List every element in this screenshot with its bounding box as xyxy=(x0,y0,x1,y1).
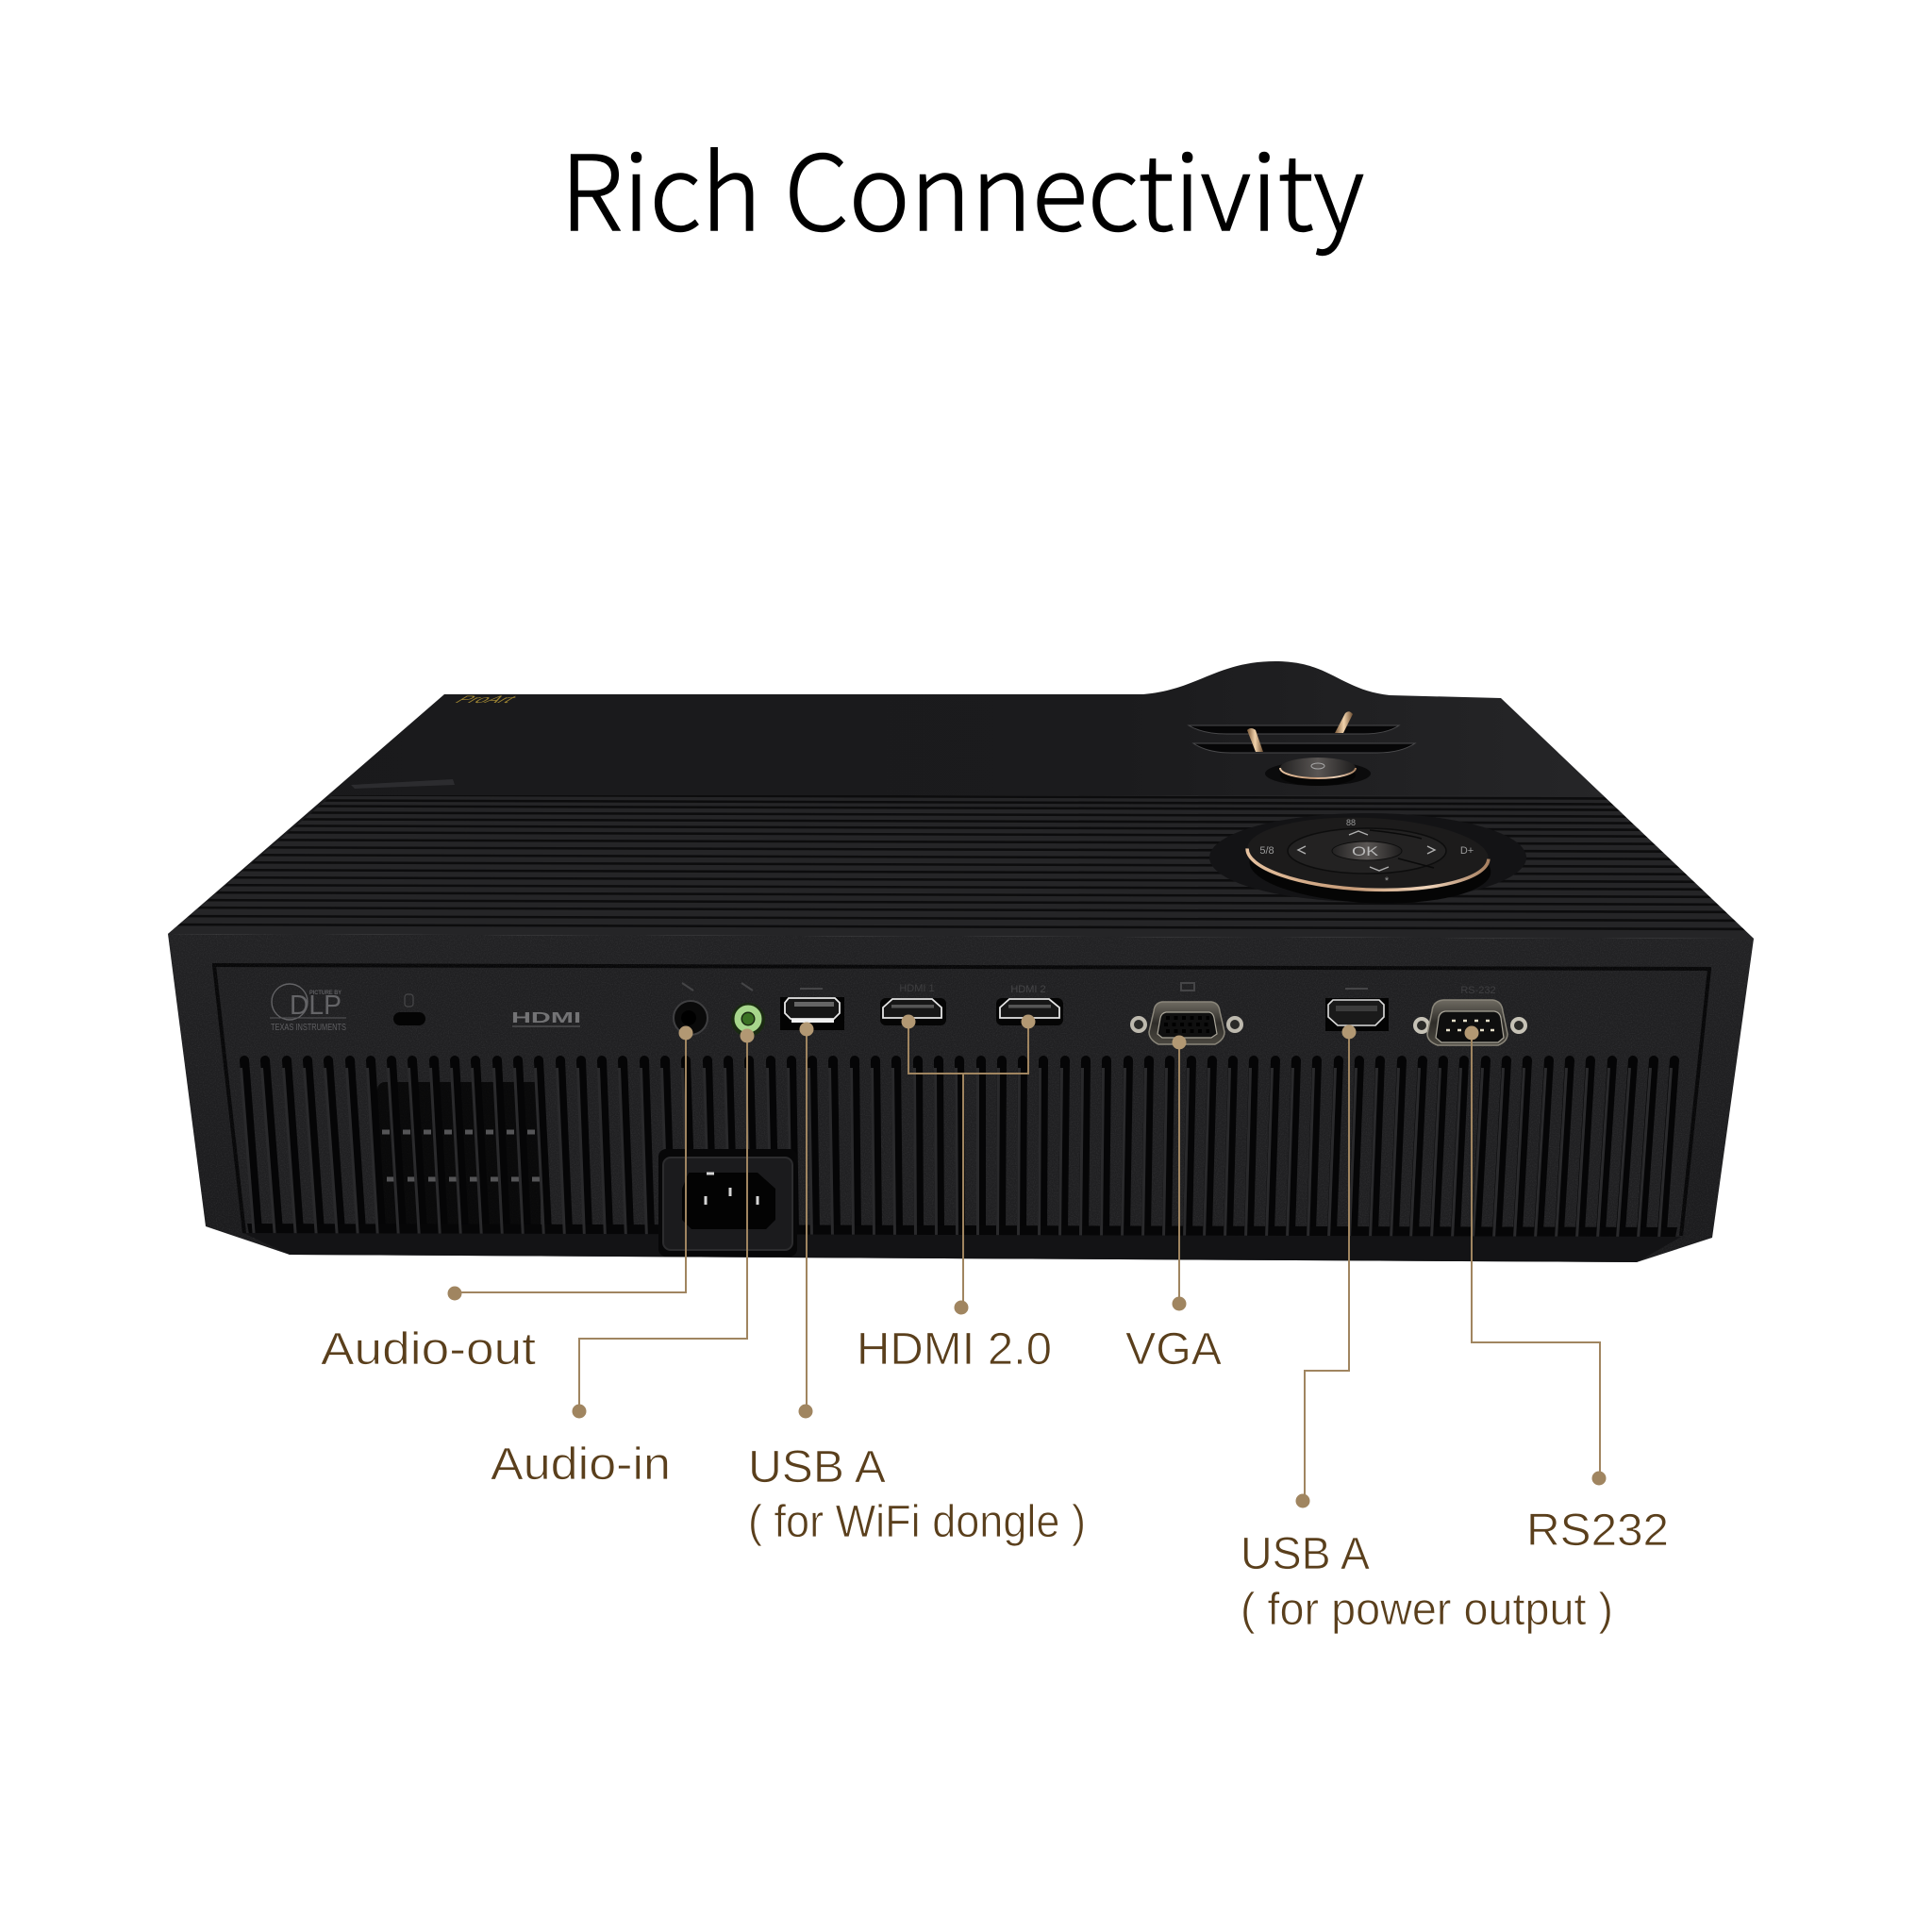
fan behind vents xyxy=(377,1082,541,1231)
callout: USB A for power output: ( for power output ) xyxy=(1241,1585,1613,1635)
control dial: 5/8 xyxy=(1259,845,1274,857)
DLP logo: DLP xyxy=(290,991,341,1021)
ventilation slots xyxy=(244,1060,1674,1231)
callout: USB A for WiFi dongle: USB A xyxy=(748,1442,886,1492)
panel edge shadows xyxy=(212,965,1711,1236)
projector body xyxy=(160,661,1764,1269)
DLP logo: PICTURE BY xyxy=(309,991,341,996)
port: VGA xyxy=(1132,1002,1241,1044)
DLP logo xyxy=(270,984,346,1033)
port: USB A power xyxy=(1325,998,1389,1031)
callout: USB A for WiFi dongle xyxy=(748,1023,1086,1547)
callout: USB A for WiFi dongle: ( for WiFi dongle ) xyxy=(748,1497,1086,1547)
HDMI logo xyxy=(511,1010,581,1026)
port: RS232 xyxy=(1415,1000,1525,1045)
DLP logo: TEXAS INSTRUMENTS xyxy=(271,1023,346,1033)
callout: RS232: RS232 xyxy=(1526,1506,1669,1556)
port: HDMI 1 xyxy=(880,998,946,1025)
dial face xyxy=(1245,812,1491,895)
slot bevels xyxy=(242,1068,1672,1239)
callout: audio-out xyxy=(321,1026,692,1374)
port: HDMI 2 xyxy=(996,998,1063,1025)
dial icons xyxy=(1298,831,1435,871)
control dial: 88 xyxy=(1346,818,1356,827)
port icon labels: HDMI 2 xyxy=(1010,984,1046,995)
port: USB A wifi xyxy=(780,997,844,1030)
security lock slot xyxy=(393,994,425,1025)
gold slider pins xyxy=(1335,711,1353,733)
slider slots xyxy=(1189,725,1399,734)
callout: audio-in: Audio-in xyxy=(491,1440,671,1490)
control dial: * xyxy=(1385,875,1390,887)
dial recess xyxy=(1209,813,1526,902)
control dial: OK xyxy=(1352,843,1379,858)
callout: HDMI 2.0: HDMI 2.0 xyxy=(857,1324,1052,1374)
callout: VGA xyxy=(1125,1036,1222,1374)
port icon labels xyxy=(682,983,1496,996)
ProArt logo: ProArt xyxy=(450,693,523,706)
bottom lip xyxy=(243,1233,1681,1262)
port icon labels: HDMI 1 xyxy=(899,983,935,994)
dial side xyxy=(1248,826,1492,908)
port: audio out xyxy=(674,1001,708,1035)
callout: audio-in xyxy=(491,1028,755,1490)
OK button xyxy=(1332,841,1402,860)
callout: RS232 xyxy=(1464,1026,1669,1556)
d-pad xyxy=(1288,828,1446,874)
slot base band xyxy=(247,1224,1677,1237)
power button xyxy=(1265,758,1371,786)
control dial: D+ xyxy=(1460,845,1474,857)
callout: VGA: VGA xyxy=(1125,1324,1222,1374)
callout: USB A for power output xyxy=(1241,1024,1613,1635)
projector top surface xyxy=(168,661,1754,939)
rear port panel xyxy=(212,965,1711,1236)
ASUS logo xyxy=(351,779,455,789)
callout: audio-out: Audio-out xyxy=(321,1324,536,1374)
surface grain xyxy=(160,929,1764,1269)
port: audio in xyxy=(731,1003,765,1037)
slider controls xyxy=(1189,711,1415,753)
title: Rich Connectivity xyxy=(560,109,1364,260)
control dial xyxy=(1209,812,1526,908)
front face xyxy=(168,934,1754,1262)
HDMI logo: HDMI xyxy=(511,1010,581,1026)
ribbed top texture xyxy=(160,791,1764,941)
callout: HDMI 2.0 xyxy=(857,1015,1052,1374)
power inlet xyxy=(658,1149,797,1257)
callout: USB A for power output: USB A xyxy=(1241,1529,1370,1579)
port icon labels: RS-232 xyxy=(1460,985,1496,996)
